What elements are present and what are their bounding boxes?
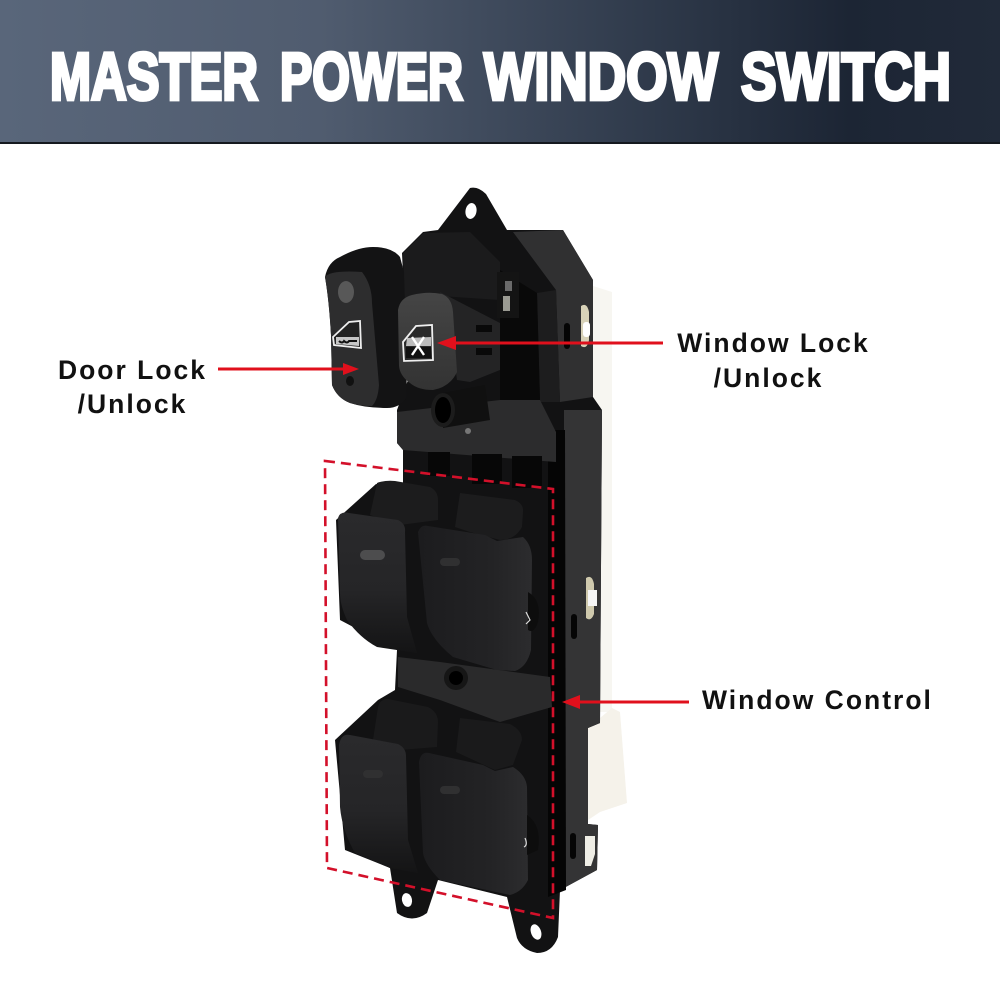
bottom mounting holes: [401, 892, 543, 941]
label: window lock: Window Lock: [677, 328, 870, 358]
upper left rocker: [338, 513, 417, 653]
title: WINDOW: [484, 40, 719, 114]
arrow: window lock: [437, 336, 663, 350]
header banner: [0, 0, 1000, 144]
door lock icon: [333, 321, 361, 348]
arrow: door lock: [218, 363, 359, 375]
upper rear switches: [370, 481, 523, 540]
hollow cylinder post: [431, 385, 490, 434]
lower left rocker: [339, 735, 418, 873]
lower rear switches: [373, 699, 522, 770]
upper right rocker: [418, 526, 532, 671]
label: door lock: /Unlock: [78, 389, 187, 419]
title: SWITCH: [741, 40, 951, 114]
switch body: [335, 188, 602, 953]
arrow: window control: [562, 695, 689, 709]
connector socket: [497, 272, 519, 318]
label: window lock: /Unlock: [714, 363, 823, 393]
product photo: master window switch: [325, 188, 627, 953]
callout: window control: [562, 685, 933, 715]
white connector housing: [588, 285, 627, 820]
door lock rocker: [325, 247, 407, 408]
side slots: [564, 305, 597, 866]
rocker indicator marks: [360, 550, 460, 794]
callout: door lock: [58, 355, 359, 419]
title: POWER: [280, 40, 463, 114]
label: window control: Window Control: [702, 685, 933, 715]
callout: window lock: [437, 328, 870, 393]
dashed outline: window control area: [325, 461, 553, 918]
side latches: [524, 592, 539, 855]
lower post: [444, 666, 468, 690]
LED window: [338, 281, 354, 303]
body shading: [397, 230, 602, 897]
window lock rocker: [398, 292, 500, 390]
lower right rocker: [419, 753, 528, 895]
window lock icon: [403, 325, 433, 361]
title: [50, 40, 951, 114]
title: MASTER: [50, 40, 258, 114]
top mounting hole: [464, 202, 478, 220]
label: door lock: Door Lock: [58, 355, 207, 385]
